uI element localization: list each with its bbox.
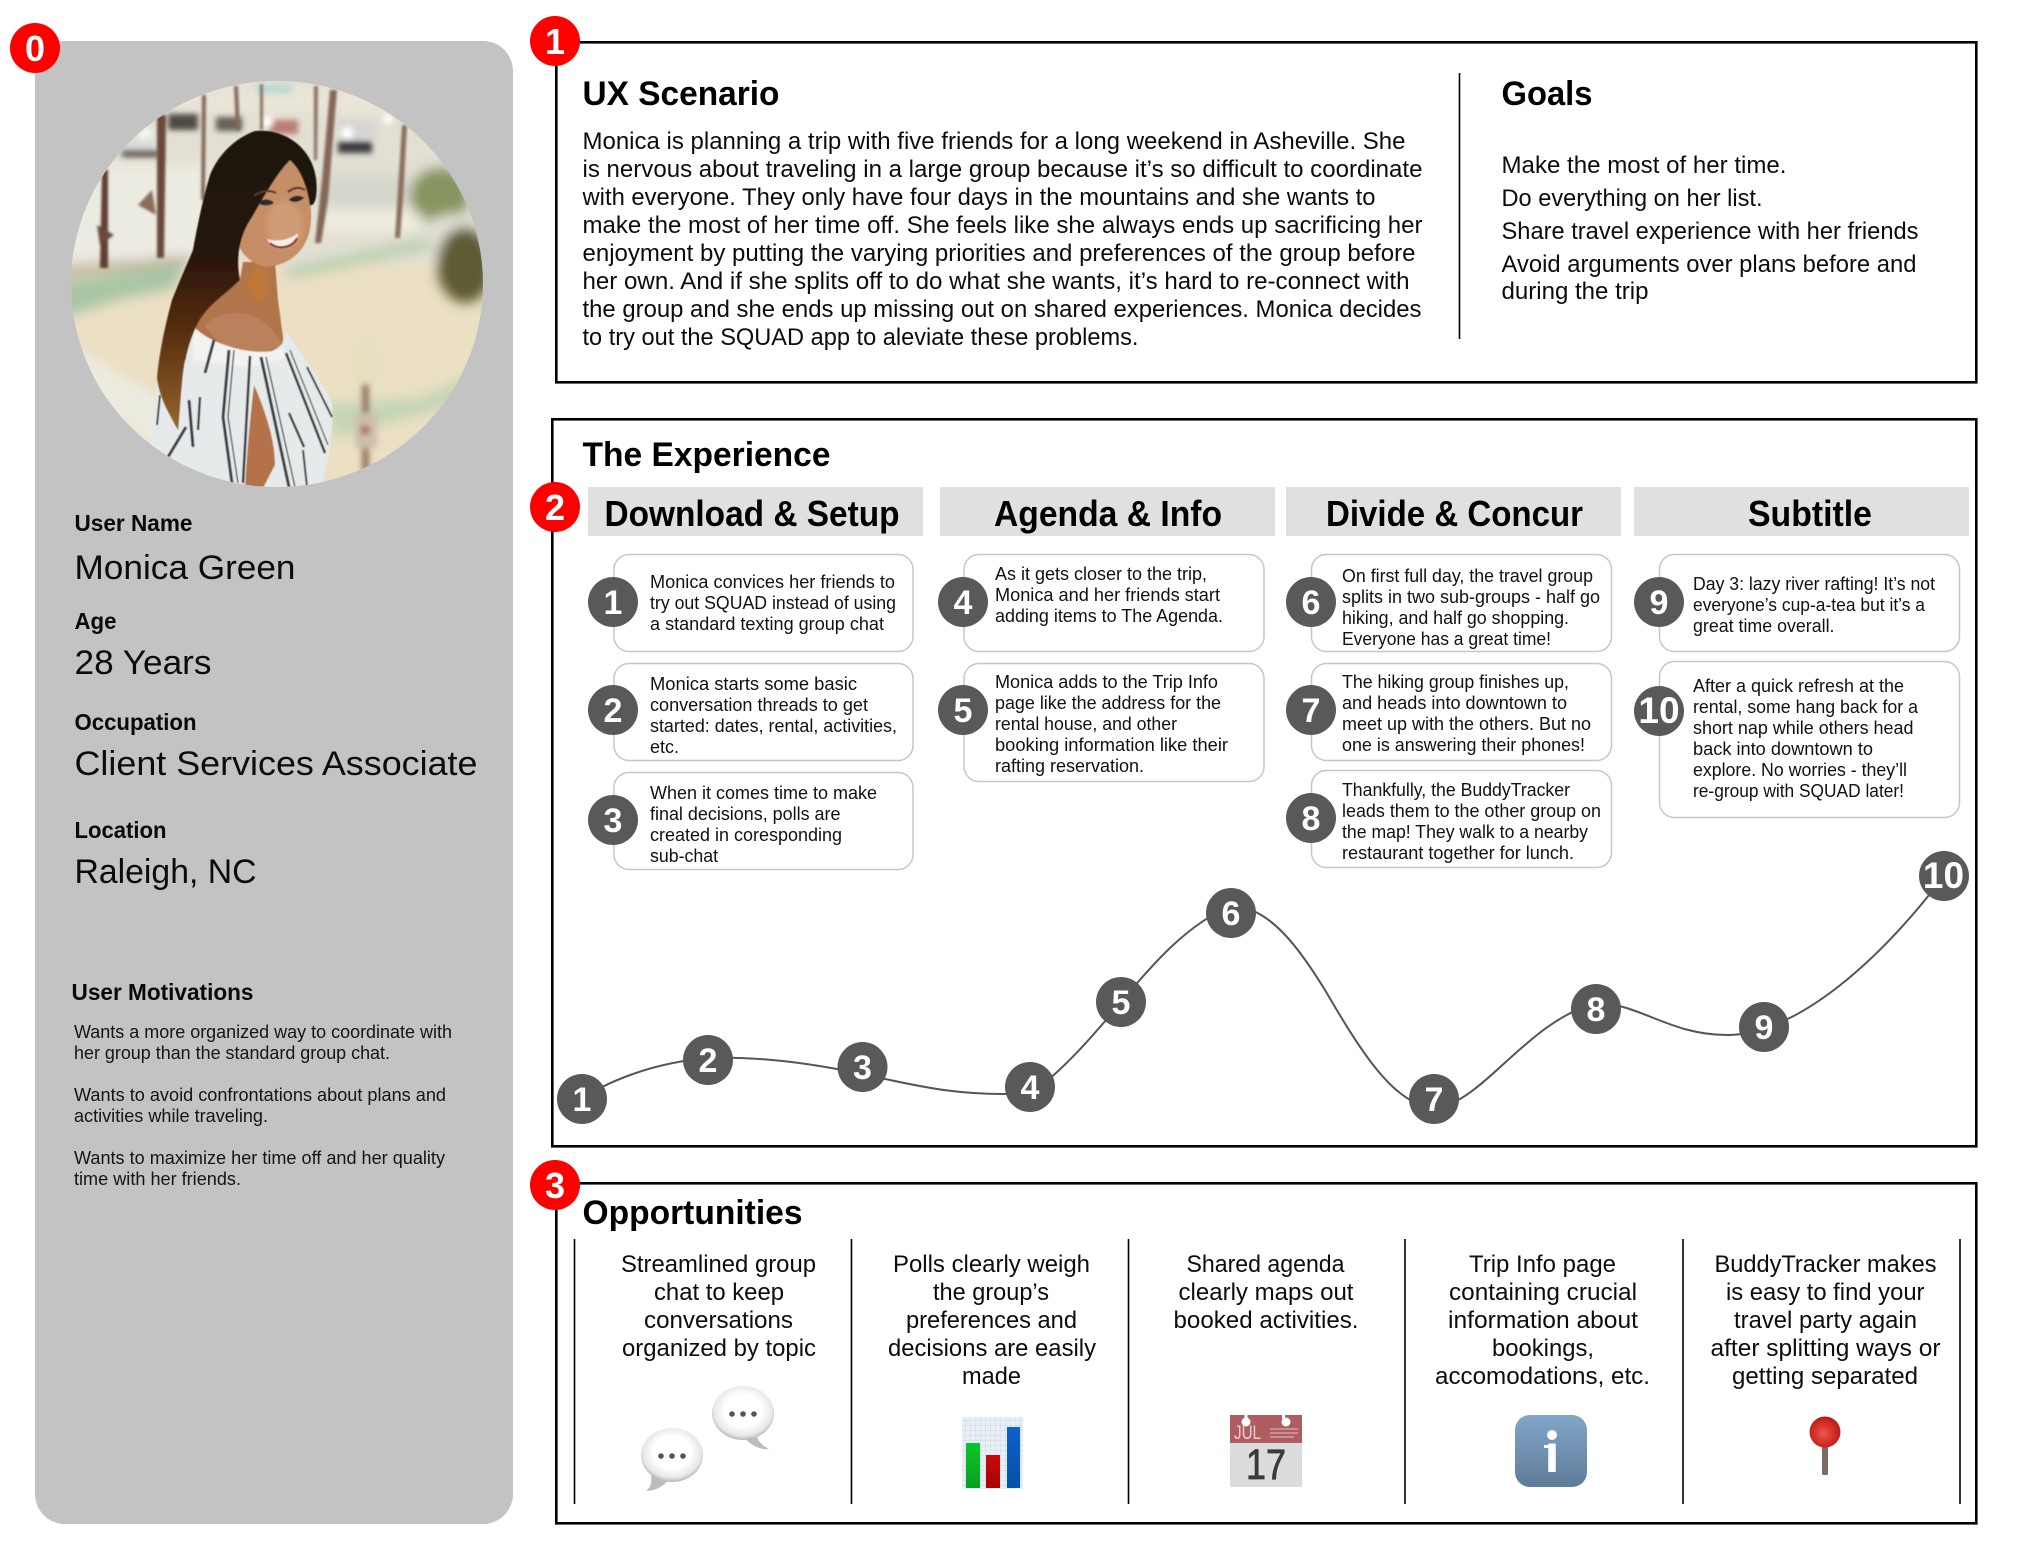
chart node 5: 5 xyxy=(1112,984,1130,1022)
opportunity 3 text xyxy=(1174,1251,1358,1334)
text block: motivations: Wants to maximize her time off and her quality xyxy=(74,1147,446,1168)
chart node 3 xyxy=(838,1042,888,1092)
chart node 4: 4 xyxy=(1021,1069,1040,1107)
text block: scenario: to try out the SQUAD app to aleviate these problems. xyxy=(582,324,1138,351)
text block: scenario: her own. And if she splits off to do what she wants, it’s hard to re-connect with xyxy=(582,268,1410,295)
neck and shoulder xyxy=(188,262,284,354)
badge 3: 3 xyxy=(545,1165,565,1206)
step card 1: Monica convices her friends to xyxy=(650,572,895,592)
icon: speech bubbles xyxy=(641,1386,774,1491)
step card 4 xyxy=(938,554,1264,652)
step card 6: On first full day, the travel group xyxy=(1342,566,1593,586)
chart node 2 xyxy=(683,1035,733,1085)
icon: map pin xyxy=(1810,1416,1840,1475)
text block: scenario: with everyone. They only have four days in the mountains and she wants to xyxy=(582,184,1376,211)
chart node 4 xyxy=(1005,1062,1055,1112)
step card 3: created in coresponding xyxy=(650,825,842,845)
chart node 3: 3 xyxy=(853,1049,872,1087)
step card 2: started: dates, rental, activities, xyxy=(650,716,897,736)
label: location: Location xyxy=(74,817,166,843)
step card 6: 6 xyxy=(1302,584,1320,622)
step card 2: Monica starts some basic xyxy=(650,674,857,694)
step card 1: 1 xyxy=(604,584,622,622)
step card 7 xyxy=(1286,664,1612,760)
opportunity 5 text: BuddyTracker makes xyxy=(1714,1251,1936,1278)
opportunity 5 text: getting separated xyxy=(1732,1363,1918,1390)
text block: goals list: Do everything on her list. xyxy=(1502,185,1762,212)
badge 2 xyxy=(530,482,580,532)
opportunity 2 text: preferences and xyxy=(906,1307,1077,1334)
step card 8: 8 xyxy=(1302,800,1320,838)
column header: divide and concur: Divide & Concur xyxy=(1326,493,1583,534)
opportunity 2 text: Polls clearly weigh xyxy=(893,1251,1090,1278)
badge 0: 0 xyxy=(25,28,45,69)
eyes, brows, smile xyxy=(258,200,274,205)
label: age: Age xyxy=(74,608,116,634)
step card 6: Everyone has a great time! xyxy=(1342,629,1551,649)
step card 6 xyxy=(1286,554,1612,652)
step card 4: As it gets closer to the trip, xyxy=(995,564,1207,584)
badge 3 xyxy=(530,1160,580,1210)
step card 5: Monica adds to the Trip Info xyxy=(995,672,1218,692)
step card 8: the map! They walk to a nearby xyxy=(1342,822,1588,842)
chart node 9: 9 xyxy=(1755,1009,1773,1047)
text block: scenario: the group and she ends up missing out on shared experiences. Monica decides xyxy=(582,296,1422,323)
step card 3: 3 xyxy=(604,802,622,840)
heading: UX scenario: UX Scenario xyxy=(582,75,780,113)
hair xyxy=(157,131,317,430)
step card 9 xyxy=(1634,554,1960,652)
chart node 10 xyxy=(1919,851,1969,901)
opportunity 5 text: is easy to find your xyxy=(1726,1279,1924,1306)
text block: motivations: Wants to avoid confrontations about plans and xyxy=(74,1084,446,1105)
step card 5: rafting reservation. xyxy=(995,756,1144,776)
opportunity 4 text: bookings, xyxy=(1492,1335,1594,1362)
chart node 7 xyxy=(1409,1074,1459,1124)
text block: motivations: time with her friends. xyxy=(74,1168,241,1189)
chart node 5 xyxy=(1096,977,1146,1027)
heading: the experience: The Experience xyxy=(582,436,830,474)
chart node 9 xyxy=(1739,1002,1789,1052)
photo: portrait of Monica xyxy=(71,81,483,487)
icon: bar chart xyxy=(962,1417,1023,1489)
opportunity 1 text: conversations xyxy=(644,1307,793,1334)
step card 2: etc. xyxy=(650,737,679,757)
opportunity 1 text: Streamlined group xyxy=(621,1251,816,1278)
opportunity 2 text: made xyxy=(962,1363,1021,1390)
text block: scenario: make the most of her time off. She feels like she always ends up sacrificing her xyxy=(582,212,1422,239)
icon: calendar xyxy=(1230,1413,1302,1489)
step card 4: Monica and her friends start xyxy=(995,585,1220,605)
step card 2: conversation threads to get xyxy=(650,695,868,715)
shirt xyxy=(150,322,332,490)
step card 8: Thankfully, the BuddyTracker xyxy=(1342,780,1570,800)
chart node 10: 10 xyxy=(1923,855,1964,896)
label: user name: User Name xyxy=(74,510,192,536)
step card 6: hiking, and half go shopping. xyxy=(1342,608,1569,628)
step card 4: 4 xyxy=(954,584,973,622)
icon: calendar: JUL xyxy=(1234,1423,1261,1444)
step card 8: leads them to the other group on xyxy=(1342,801,1601,821)
step card 10: back into downtown to xyxy=(1693,739,1873,759)
step card 5: booking information like their xyxy=(995,735,1228,755)
icon: information: ı xyxy=(1544,1424,1560,1484)
face xyxy=(237,160,311,267)
value: occupation: Client Services Associate xyxy=(74,745,478,783)
chart node 6: 6 xyxy=(1222,895,1240,933)
chart node 6 xyxy=(1206,888,1256,938)
step card 3: When it comes time to make xyxy=(650,783,877,803)
heading: user motivations: User Motivations xyxy=(72,979,254,1005)
step card 6: splits in two sub-groups - half go xyxy=(1342,587,1600,607)
text block: goals list: Avoid arguments over plans before and xyxy=(1502,251,1916,278)
step card 10: re-group with SQUAD later! xyxy=(1693,781,1904,801)
step card 10: explore. No worries - they’ll xyxy=(1693,760,1907,780)
step card 7: 7 xyxy=(1302,692,1320,730)
step card 7: and heads into downtown to xyxy=(1342,693,1567,713)
text block: goals list: during the trip xyxy=(1502,278,1648,305)
opportunity 1 text: chat to keep xyxy=(654,1279,784,1306)
text block: motivations: her group than the standard group chat. xyxy=(74,1042,390,1063)
chart node 1: 1 xyxy=(573,1081,591,1119)
opportunity 4 text: Trip Info page xyxy=(1469,1251,1616,1278)
opportunity 2 text: decisions are easily xyxy=(888,1335,1097,1362)
opportunity 1 text: organized by topic xyxy=(622,1335,816,1362)
badge 0 xyxy=(10,23,60,73)
step card 1 xyxy=(588,554,913,652)
icon: information xyxy=(1515,1415,1587,1487)
text block: scenario: enjoyment by putting the varying priorities and preferences of the group before xyxy=(582,240,1416,267)
badge 2: 2 xyxy=(545,487,565,528)
opportunity 5 text: after splitting ways or xyxy=(1710,1335,1940,1362)
step card 10: rental, some hang back for a xyxy=(1693,697,1919,717)
heading: opportunities: Opportunities xyxy=(582,1194,802,1232)
icon: calendar: 17 xyxy=(1246,1441,1286,1489)
badge 1 xyxy=(530,16,580,66)
step card 5 xyxy=(938,664,1264,782)
step card 3 xyxy=(588,772,913,870)
value: location: Raleigh, NC xyxy=(74,853,256,891)
panel: the experience xyxy=(552,419,1976,1146)
opportunity 2 text: the group’s xyxy=(933,1279,1049,1306)
value: age: 28 Years xyxy=(74,644,212,682)
step card 9: great time overall. xyxy=(1693,616,1834,636)
opportunity 3 text: booked activities. xyxy=(1174,1307,1358,1334)
step card 2: 2 xyxy=(604,692,622,730)
step card 10: 10 xyxy=(1638,690,1680,731)
chart: experience journey curve xyxy=(557,851,1969,1124)
text block: motivations xyxy=(74,1021,452,1189)
step card 10: After a quick refresh at the xyxy=(1693,676,1904,696)
chart node 1 xyxy=(557,1074,607,1124)
text block: goals list: Share travel experience with her friends xyxy=(1502,218,1918,245)
text block: goals list: Make the most of her time. xyxy=(1502,152,1786,179)
label: occupation: Occupation xyxy=(74,709,196,735)
column header: download and setup: Download & Setup xyxy=(604,493,900,534)
chart node 8: 8 xyxy=(1587,991,1605,1029)
chart node 7: 7 xyxy=(1425,1081,1443,1119)
badge 1: 1 xyxy=(545,21,565,62)
text block: scenario xyxy=(582,128,1422,351)
step card 2 xyxy=(588,664,913,760)
opportunity 1 text xyxy=(621,1251,816,1362)
step card 9: Day 3: lazy river rafting! It’s not xyxy=(1693,574,1935,594)
opportunity 3 text: clearly maps out xyxy=(1178,1279,1354,1306)
step card 9: everyone’s cup-a-tea but it’s a xyxy=(1693,595,1926,615)
step card 8: restaurant together for lunch. xyxy=(1342,843,1574,863)
column header: agenda and info: Agenda & Info xyxy=(994,493,1222,534)
step card 10: short nap while others head xyxy=(1693,718,1914,738)
opportunity 4 text: information about xyxy=(1448,1307,1638,1334)
step card 5: 5 xyxy=(954,692,972,730)
step card 10 xyxy=(1634,662,1960,818)
text block: scenario: Monica is planning a trip with five friends for a long weekend in Asheville. She xyxy=(582,128,1406,155)
opportunity 5 text xyxy=(1710,1251,1940,1390)
text block: motivations: activities while traveling. xyxy=(74,1105,268,1126)
step card 8 xyxy=(1286,770,1612,868)
column header: subtitle: Subtitle xyxy=(1748,493,1872,534)
opportunity 5 text: travel party again xyxy=(1734,1307,1917,1334)
step card 1: a standard texting group chat xyxy=(650,614,884,634)
column header: agenda and info xyxy=(940,487,1275,536)
step card 5: rental house, and other xyxy=(995,714,1177,734)
step card 7: one is answering their phones! xyxy=(1342,735,1585,755)
step card 3: sub-chat xyxy=(650,846,718,866)
step card 7: The hiking group finishes up, xyxy=(1342,672,1569,692)
opportunity 4 text xyxy=(1435,1251,1650,1390)
opportunity 4 text: containing crucial xyxy=(1449,1279,1637,1306)
chart node 8 xyxy=(1571,984,1621,1034)
panel: user profile sidebar xyxy=(35,41,513,1524)
text block: motivations: Wants a more organized way to coordinate with xyxy=(74,1021,452,1042)
opportunity 4 text: accomodations, etc. xyxy=(1435,1363,1650,1390)
panel: UX scenario and goals xyxy=(556,42,1976,382)
step card 7: meet up with the others. But no xyxy=(1342,714,1591,734)
panel: opportunities xyxy=(556,1183,1976,1523)
step card 5: page like the address for the xyxy=(995,693,1221,713)
column header: subtitle xyxy=(1634,487,1969,536)
chart node 2: 2 xyxy=(699,1042,717,1080)
step card 3: final decisions, polls are xyxy=(650,804,840,824)
opportunity 2 text xyxy=(888,1251,1097,1390)
opportunity 3 text: Shared agenda xyxy=(1186,1251,1345,1278)
step card 4: adding items to The Agenda. xyxy=(995,606,1223,626)
step card 9: 9 xyxy=(1650,584,1668,622)
value: user name: Monica Green xyxy=(74,549,296,587)
text block: goals list xyxy=(1502,152,1918,305)
heading: goals: Goals xyxy=(1502,75,1592,113)
column header: divide and concur xyxy=(1286,487,1621,536)
text block: scenario: is nervous about traveling in a large group because it’s so difficult to coordinate xyxy=(582,156,1422,183)
step card 1: try out SQUAD instead of using xyxy=(650,593,896,613)
